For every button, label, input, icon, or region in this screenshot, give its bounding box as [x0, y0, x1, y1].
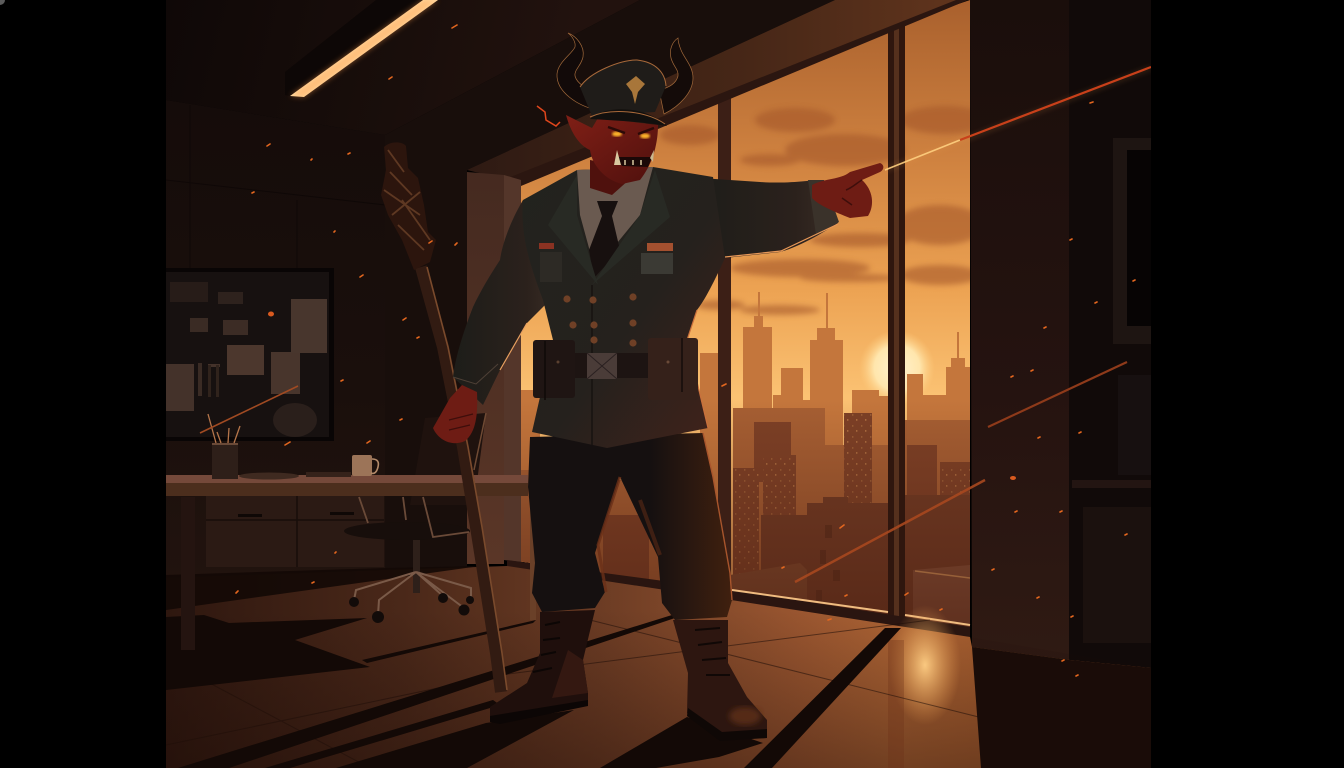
eyes: [612, 132, 650, 138]
ember spots: [268, 312, 1016, 480]
pen cup: [208, 414, 240, 479]
fire wisp: [537, 106, 560, 126]
corner highlight: [0, 0, 5, 5]
window: sky and city: [505, 0, 990, 640]
room scene: [166, 0, 1151, 768]
rope-wrapped staff top: [381, 142, 436, 270]
lapels: [548, 170, 670, 285]
foreground roofs: [730, 563, 970, 630]
back wall: [166, 100, 385, 580]
clouds: [660, 106, 990, 315]
mid skyline: [521, 408, 970, 580]
ceiling: [166, 0, 640, 135]
dark floor at right: [972, 647, 1151, 768]
ceiling light: [285, 0, 438, 97]
fanged mouth: [614, 150, 654, 167]
right wall with cabinet: [1069, 0, 1151, 668]
pointing arm: [713, 178, 839, 258]
medals and pockets: [539, 243, 673, 282]
belt and pouches: [533, 338, 698, 400]
shirt and tie: [577, 167, 653, 278]
peaked cap: [580, 60, 667, 126]
floor shadows: [166, 566, 901, 768]
office chair seat and base: [344, 497, 474, 623]
staff: [381, 142, 507, 692]
neck: [590, 160, 640, 195]
window frame: [504, 0, 970, 640]
left horn: [557, 33, 598, 110]
left boot: [490, 610, 595, 724]
office chair back: [468, 413, 486, 475]
left hand gripping staff: [433, 385, 477, 443]
coffee mug: [352, 455, 378, 476]
city window lights: [733, 413, 970, 578]
near skyline: [603, 413, 970, 593]
head: [566, 115, 658, 184]
right boot: [673, 620, 767, 741]
floating embers: [236, 25, 1135, 676]
jacket: [522, 167, 725, 448]
floor: [166, 566, 1151, 768]
laser streaks: [200, 67, 1151, 582]
soffit above window: [467, 0, 960, 180]
right horn: [659, 38, 693, 114]
buttons: [563, 293, 637, 347]
desk: [166, 414, 536, 650]
pointing hand: [812, 163, 883, 218]
trousers: [528, 433, 732, 620]
character: [433, 33, 883, 741]
window reveal: [467, 172, 504, 564]
foreground buildings: [761, 495, 970, 625]
left arm: [453, 200, 544, 405]
right pillar: [970, 0, 1069, 660]
side wall: [385, 0, 835, 570]
sun: [862, 334, 931, 400]
corkboard: [166, 268, 334, 441]
far skyline: [521, 292, 970, 563]
